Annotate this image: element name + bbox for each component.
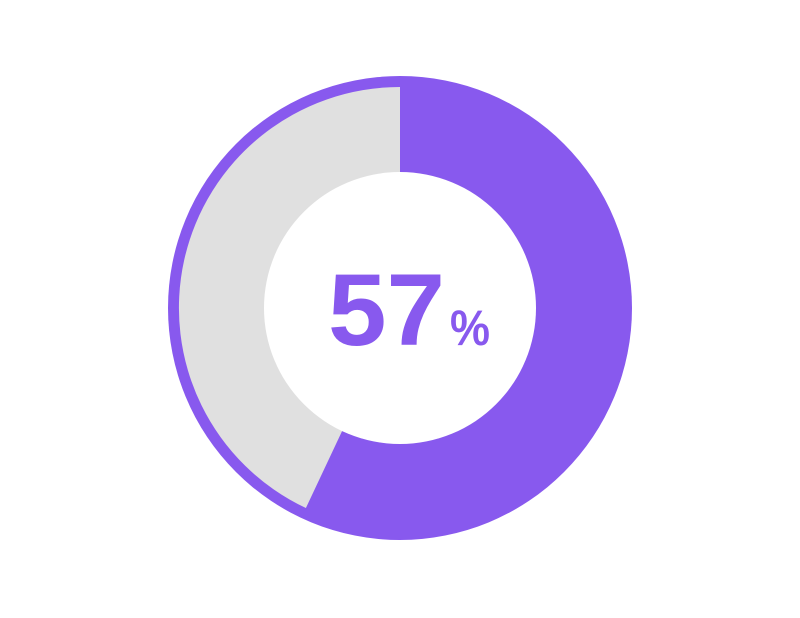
grey remainder segment (43%) [179,87,400,508]
percentage label: 57 [328,253,445,367]
percentage label: % [450,300,490,356]
inner white hole [264,172,536,444]
chart ring [168,76,632,540]
purple outer circle (57% segment + border) [168,76,632,540]
